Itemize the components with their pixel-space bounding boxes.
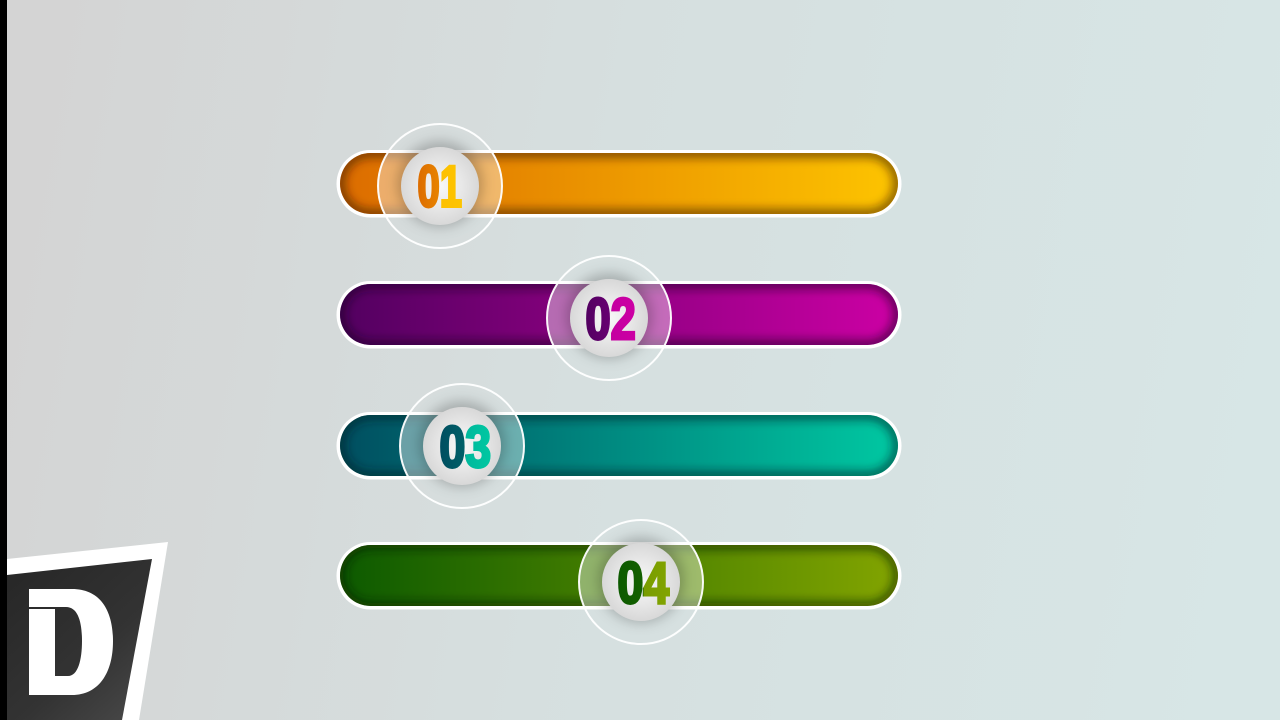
number 04: 04 xyxy=(618,551,669,616)
bar 2: purple xyxy=(336,281,902,348)
logo letter D xyxy=(29,589,113,695)
bar 1: orange xyxy=(336,150,902,218)
logo badge xyxy=(7,542,168,720)
number 01: 01 xyxy=(418,154,462,219)
marker 02 xyxy=(547,256,671,380)
bar 4: green xyxy=(336,542,902,610)
number 03: 03 xyxy=(440,415,491,480)
number 02: 02 xyxy=(586,288,636,352)
left black edge strip xyxy=(0,0,7,720)
marker 03 xyxy=(400,384,524,508)
marker 01 xyxy=(378,124,502,248)
infographic canvas xyxy=(0,0,902,720)
marker 04 xyxy=(579,520,703,644)
bar 3: teal xyxy=(336,412,902,480)
